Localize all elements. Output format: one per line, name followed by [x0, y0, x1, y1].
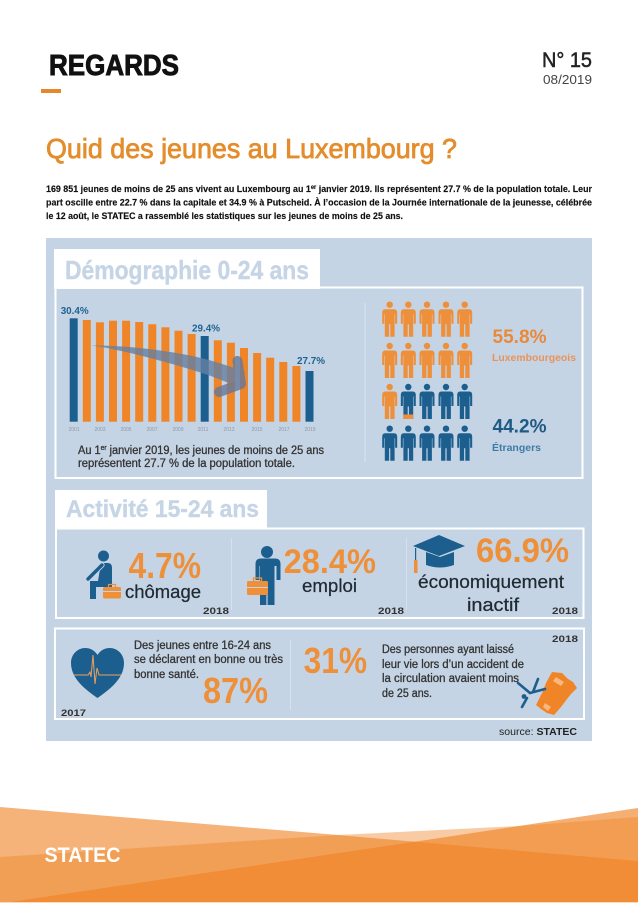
intro text: janvier 2019. Ils représentent 27.7 % de la population totale. Leur: [316, 184, 592, 194]
title: Quid des jeunes au Luxembourg ?: [46, 133, 457, 164]
stat: économiquement inactif: économiquement: [418, 572, 564, 592]
text: santé: [134, 640, 283, 681]
stat: économiquement inactif: 2018: [552, 606, 578, 617]
stat: économiquement inactif: [418, 532, 578, 617]
intro text: part oscille entre 22.7 % dans la capitale et 34.9 % à Putscheid. À l’occasion de la Journée internationale de la jeunesse, célébrée: [46, 198, 592, 208]
stat: chômage: 2018: [203, 606, 229, 617]
bar chart: share of young people 2001-2019: 2019: [304, 427, 316, 433]
stat: économiquement inactif: inactif: [467, 595, 520, 615]
stat: Luxembourgeois: Luxembourgeois: [492, 352, 576, 364]
stat: emploi: [284, 543, 404, 617]
icon: heart with pulse line: [71, 648, 124, 698]
icon: seated person with briefcase: [88, 550, 121, 599]
text: accidents: leur vie lors d’un accident de: [382, 659, 524, 671]
bar chart: share of young people 2001-2019: [61, 306, 325, 433]
bar chart: share of young people 2001-2019: 2005: [120, 427, 132, 433]
text: accidents: de 25 ans.: [382, 688, 432, 700]
stat: chômage: [125, 545, 229, 617]
issue number and date: N° 15: [542, 49, 592, 72]
text: accidents: [382, 644, 524, 700]
heading: Activité 15-24 ans: [55, 490, 267, 529]
logo: REGARDS: REGARDS: [49, 50, 179, 82]
panel: infographic background: [46, 238, 592, 741]
stat: 87%: 87%: [203, 670, 268, 711]
bar chart: share of young people 2001-2019: 2013: [223, 427, 235, 433]
bar chart: share of young people 2001-2019: 2017: [278, 427, 290, 433]
stat: emploi: emploi: [302, 576, 357, 596]
panel: activité: [55, 490, 584, 618]
stat: emploi: 2018: [378, 606, 404, 617]
icon: graduation cap: [413, 535, 465, 573]
bar chart: share of young people 2001-2019: 2009: [172, 427, 184, 433]
bar chart: share of young people 2001-2019: 2011: [198, 427, 209, 433]
chart caption: Au 1: [78, 445, 102, 457]
heading: Démographie 0-24 ans: [54, 249, 320, 289]
issue number and date: 08/2019: [543, 72, 592, 87]
bar chart: share of young people 2001-2019: 2001: [68, 427, 80, 433]
stat: Luxembourgeois: [492, 327, 576, 364]
stat: emploi: 28.4%: [284, 543, 376, 581]
bar chart: share of young people 2001-2019: 2003: [94, 427, 106, 433]
label: 2017: 2017: [61, 708, 86, 719]
icon: car accident: [518, 672, 577, 715]
text: santé: se déclarent en bonne ou très: [134, 654, 283, 666]
chart caption: représentent 27.7 % de la population totale.: [78, 458, 295, 470]
footer: orange waves: [0, 807, 638, 903]
bar chart: share of young people 2001-2019: 30.4%: [61, 306, 89, 317]
intro text: [46, 184, 592, 221]
chart caption: [78, 445, 324, 470]
chart caption: er: [101, 445, 107, 452]
stat: Étrangers: [492, 417, 547, 454]
text: santé: bonne santé.: [134, 669, 199, 681]
arrow: downward trend: [92, 345, 245, 392]
intro text: er: [311, 185, 317, 191]
issue number and date: [542, 49, 592, 87]
text: accidents: la circulation avaient moins: [382, 673, 519, 685]
stat: chômage: chômage: [125, 582, 201, 602]
bar chart: share of young people 2001-2019: 2015: [251, 427, 263, 433]
logo: STATEC: STATEC: [44, 844, 120, 867]
stat: chômage: 4.7%: [128, 545, 201, 586]
heading: Activité 15-24 ans: Activité 15-24 ans: [66, 496, 259, 523]
stat: économiquement inactif: 66.9%: [476, 532, 569, 570]
text: accidents: Des personnes ayant laissé: [382, 644, 514, 656]
panel: santé et accidents: [55, 628, 584, 738]
pictogram: 20 people: [382, 302, 472, 461]
icon: standing person with briefcase: [247, 546, 280, 605]
text: santé: Des jeunes entre 16-24 ans: [134, 640, 271, 652]
stat: 31%: 31%: [304, 640, 367, 681]
stat: Luxembourgeois: 55.8%: [492, 327, 547, 348]
label: 2018: 2018: [552, 634, 578, 645]
heading: Démographie 0-24 ans: Démographie 0-24 ans: [65, 255, 309, 285]
source: source: STATEC: [499, 727, 577, 738]
stat: Étrangers: Étrangers: [492, 441, 541, 454]
bar chart: share of young people 2001-2019: 27.7%: [297, 356, 325, 367]
intro text: 169 851 jeunes de moins de 25 ans vivent au Luxembourg au 1: [46, 184, 323, 194]
logo: REGARDS: [41, 50, 179, 93]
chart caption: janvier 2019, les jeunes de moins de 25 ans: [107, 445, 324, 457]
stat: Étrangers: 44.2%: [492, 417, 547, 438]
panel: démographie: [54, 249, 582, 478]
bar chart: share of young people 2001-2019: 29.4%: [192, 324, 220, 335]
intro text: le 12 août, le STATEC a rassemblé les statistiques sur les jeunes de moins de 25 ans.: [46, 211, 403, 221]
bar chart: share of young people 2001-2019: 2007: [146, 427, 158, 433]
